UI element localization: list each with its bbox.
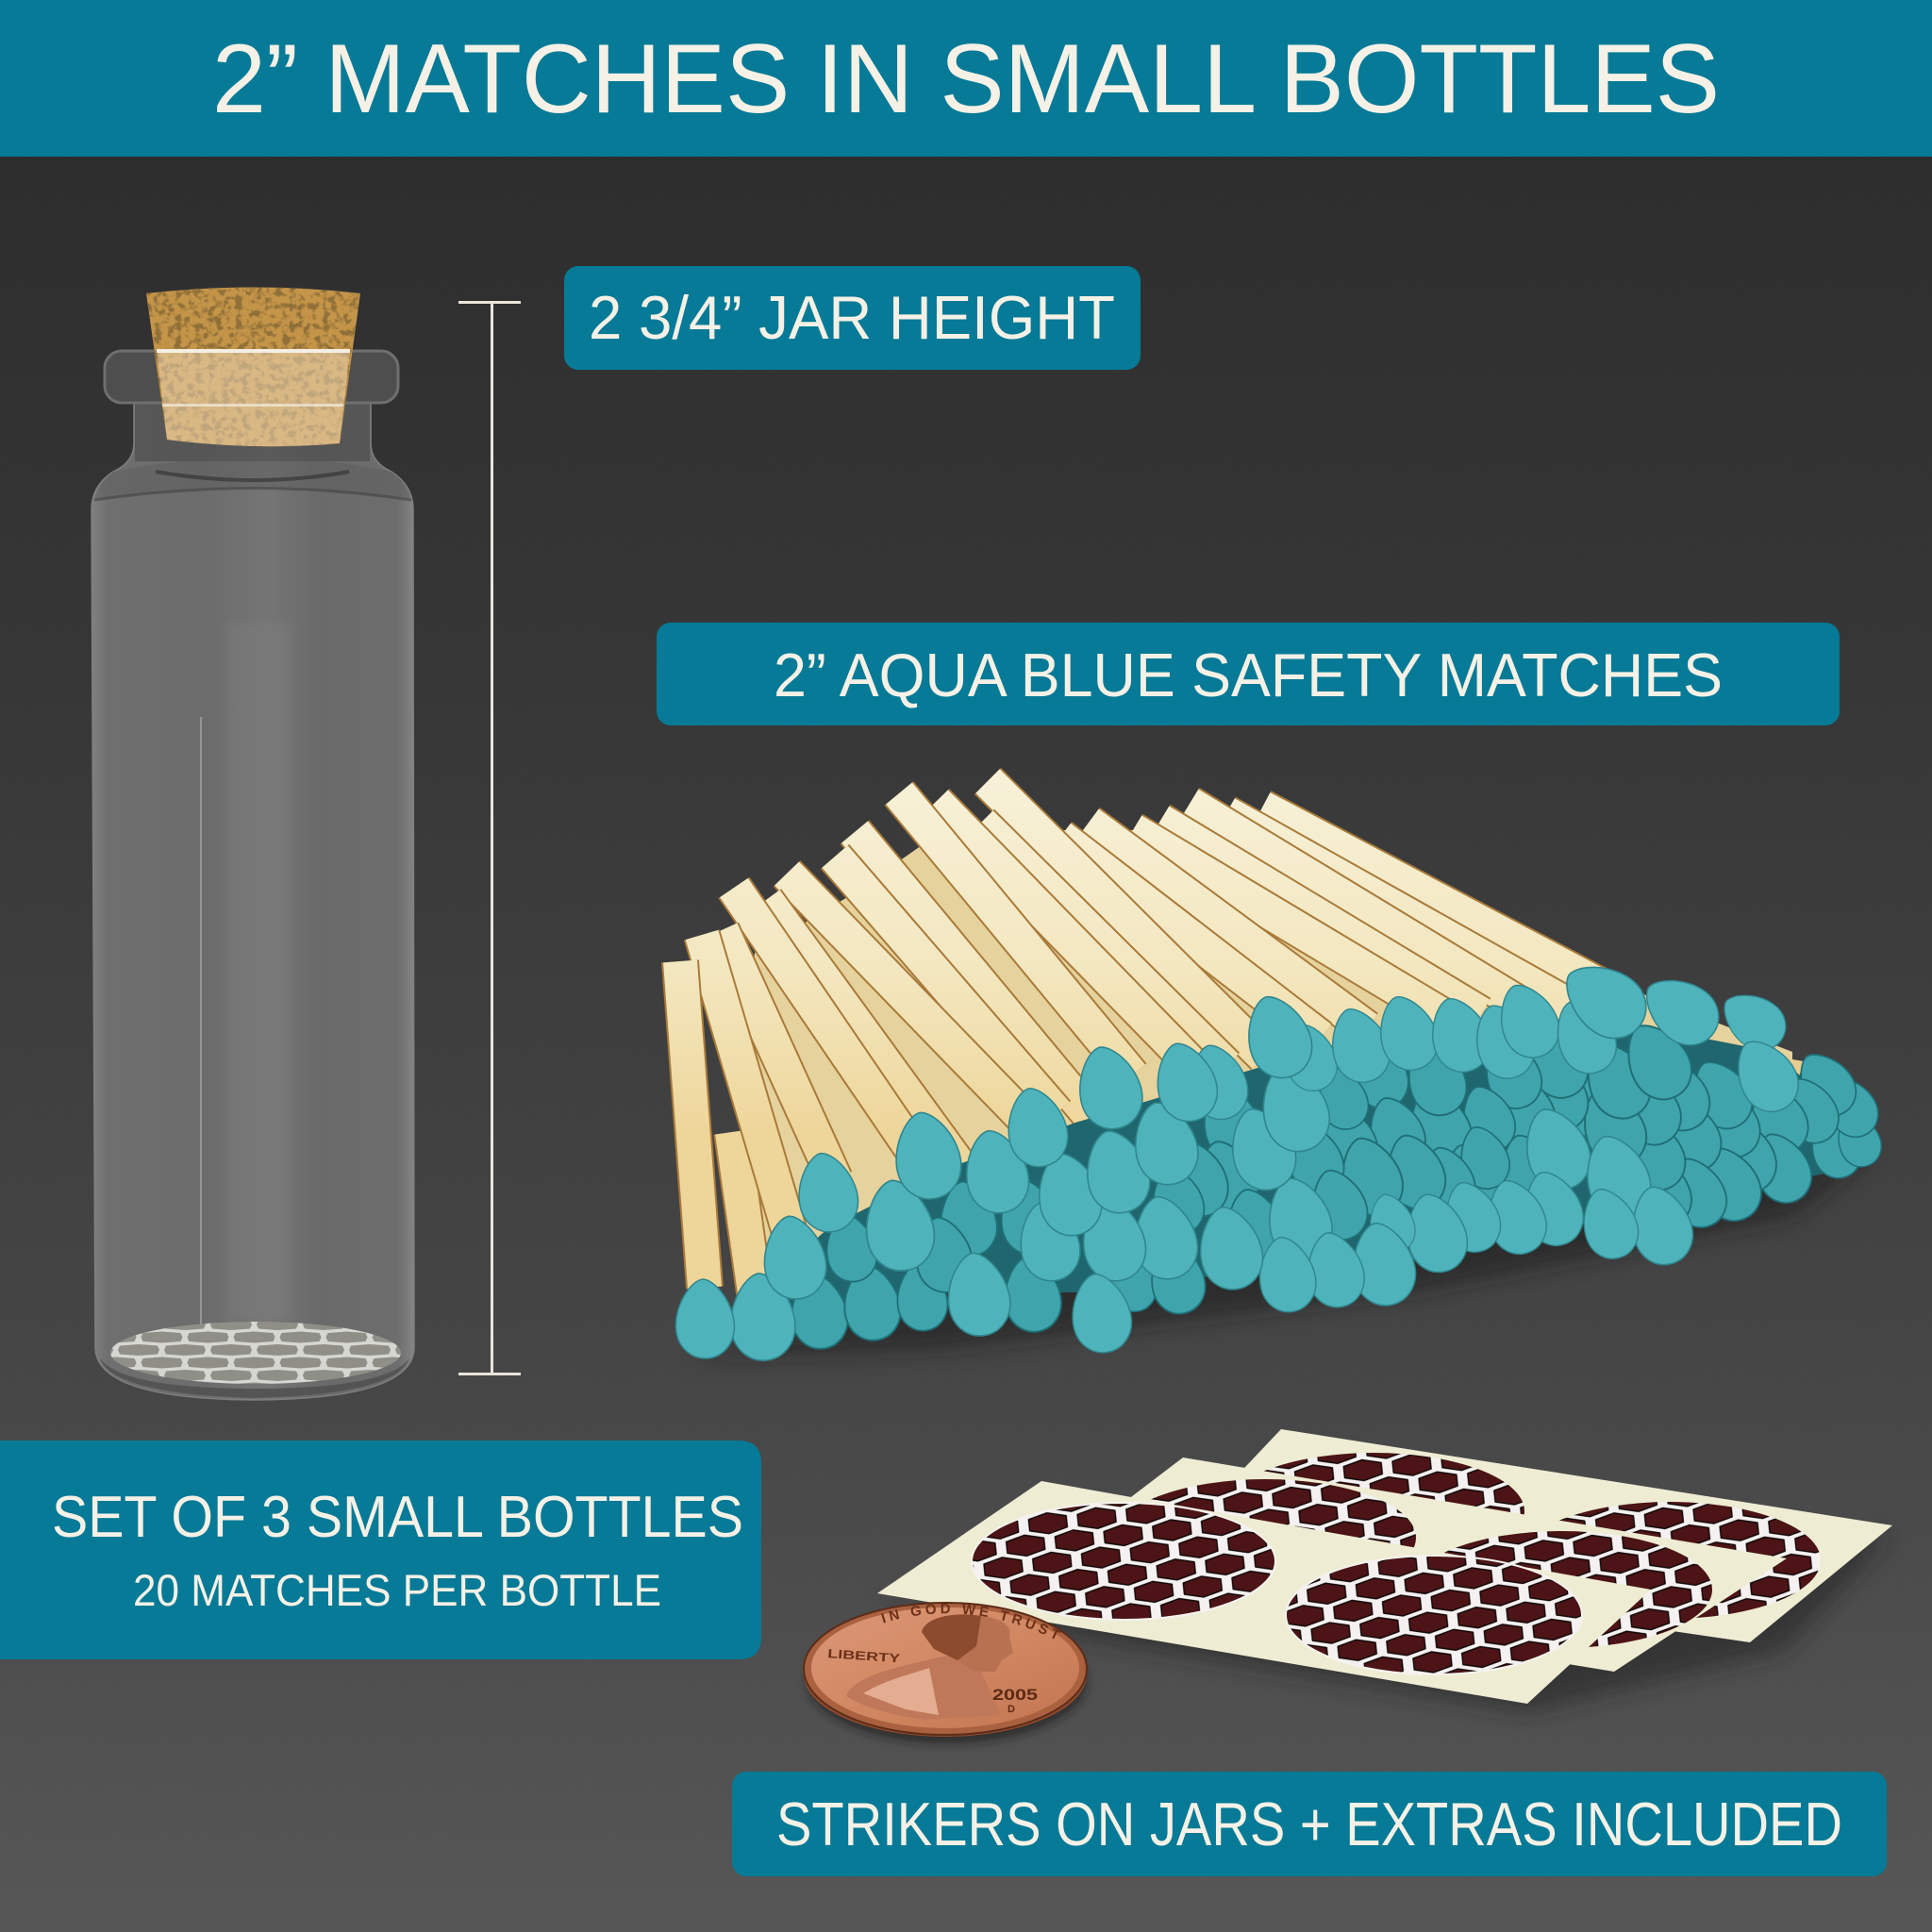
striker cards: [877, 1429, 1892, 1712]
matchsticks: [680, 781, 1609, 1292]
penny for scale: [803, 1602, 1091, 1747]
jar body: [92, 403, 414, 1400]
title banner: 2” MATCHES IN SMALL BOTTLES: [212, 25, 1720, 134]
middle card: [1028, 1457, 1787, 1672]
lincoln portrait: [846, 1614, 1013, 1720]
head mass backing: [736, 1019, 1863, 1311]
wood backing: [745, 813, 1792, 1255]
card shadow: [877, 1533, 1892, 1712]
penny for scale: 2005: [992, 1686, 1038, 1704]
label: set of bottles: [0, 1441, 761, 1659]
pile of matches: [674, 781, 1888, 1363]
rear sticks at right: [1686, 1041, 1804, 1099]
label: jar height: 2 3/4” JAR HEIGHT: [589, 283, 1115, 352]
title banner: [0, 0, 1932, 157]
glass jar with cork: [92, 287, 414, 1400]
label: jar height: [564, 266, 1141, 370]
front card: [877, 1481, 1651, 1704]
striker on jar bottom: [110, 1322, 401, 1384]
label line two: 20 MATCHES PER BOTTLE: [133, 1565, 661, 1615]
label: safety matches: 2” AQUA BLUE SAFETY MATCHES: [774, 641, 1723, 709]
label: safety matches: [657, 623, 1840, 725]
match heads, lower layers: [786, 1012, 1888, 1353]
label: strikers: [732, 1772, 1887, 1876]
penny lettering: IN GOD WE TRUST: [881, 1604, 1060, 1640]
jar lip: [105, 351, 398, 403]
penny for scale: D: [1008, 1704, 1015, 1715]
back card: [1160, 1429, 1892, 1642]
match heads, front layers: [674, 949, 1808, 1363]
height measure bracket: [458, 301, 521, 1375]
pile shadow: [689, 1151, 1877, 1358]
label line one: SET OF 3 SMALL BOTTLES: [52, 1485, 743, 1550]
cork: [146, 287, 360, 446]
penny for scale: LIBERTY: [827, 1646, 901, 1665]
